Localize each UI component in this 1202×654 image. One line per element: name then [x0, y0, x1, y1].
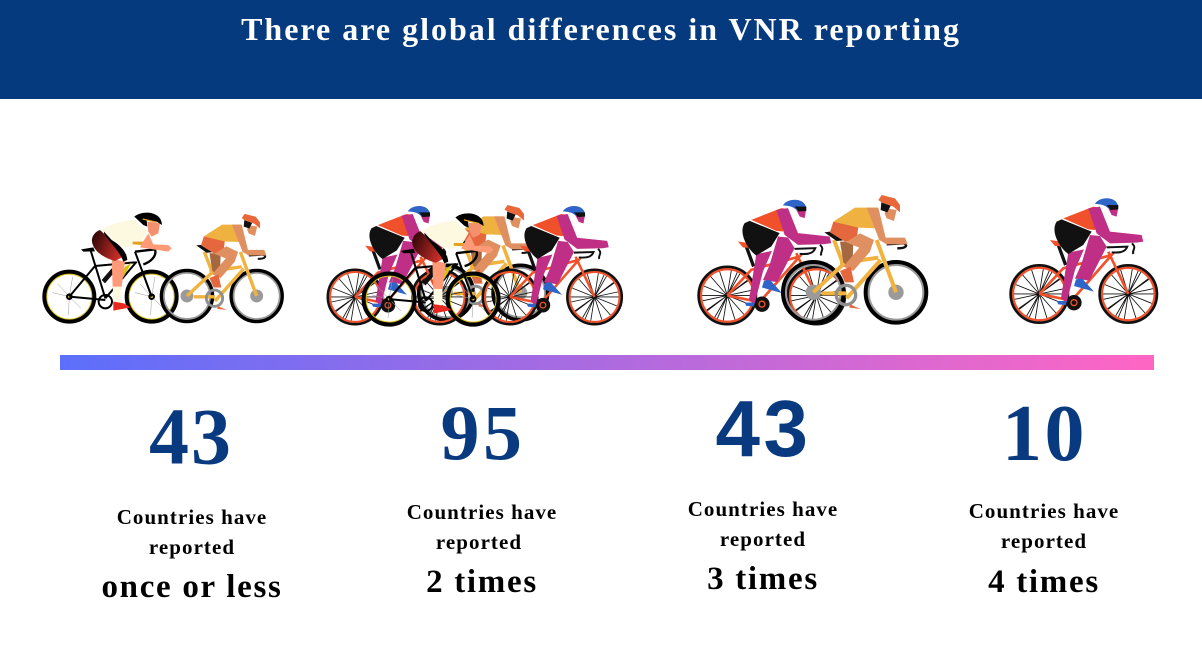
- column: 4 times: [969, 390, 1119, 600]
- column: 4 times: reported: [1001, 529, 1087, 553]
- column: 2 times: reported: [436, 530, 522, 554]
- column: 3 times: reported: [720, 527, 806, 551]
- column: once or less: reported: [149, 535, 235, 559]
- column: 3 times: 3 times: [707, 561, 819, 597]
- column: 2 times: 2 times: [426, 564, 538, 600]
- icon: cyclists group 1: [44, 213, 282, 322]
- number 43: 43: [716, 384, 811, 473]
- description: Countries have: [688, 497, 838, 521]
- description: Countries have: [969, 499, 1119, 523]
- header banner: [0, 0, 1202, 99]
- column: 3 times: [688, 384, 838, 597]
- icon: cyclists group 3: [699, 195, 926, 324]
- icon: cyclists group 2: [328, 205, 622, 325]
- column: 4 times: 4 times: [988, 564, 1100, 600]
- icon: cyclist group 4: [1011, 198, 1157, 323]
- number 43: 43: [149, 394, 233, 482]
- description: Countries have: [407, 500, 557, 524]
- title: There are global differences in VNR reporting: [241, 11, 961, 47]
- number 10: 10: [1002, 390, 1087, 478]
- column: 2 times: [407, 389, 557, 600]
- description: Countries have: [117, 505, 267, 529]
- column: once or less: once or less: [101, 569, 283, 605]
- column: once or less: [101, 394, 283, 605]
- number 95: 95: [440, 389, 526, 476]
- gradient timeline bar: [60, 355, 1154, 370]
